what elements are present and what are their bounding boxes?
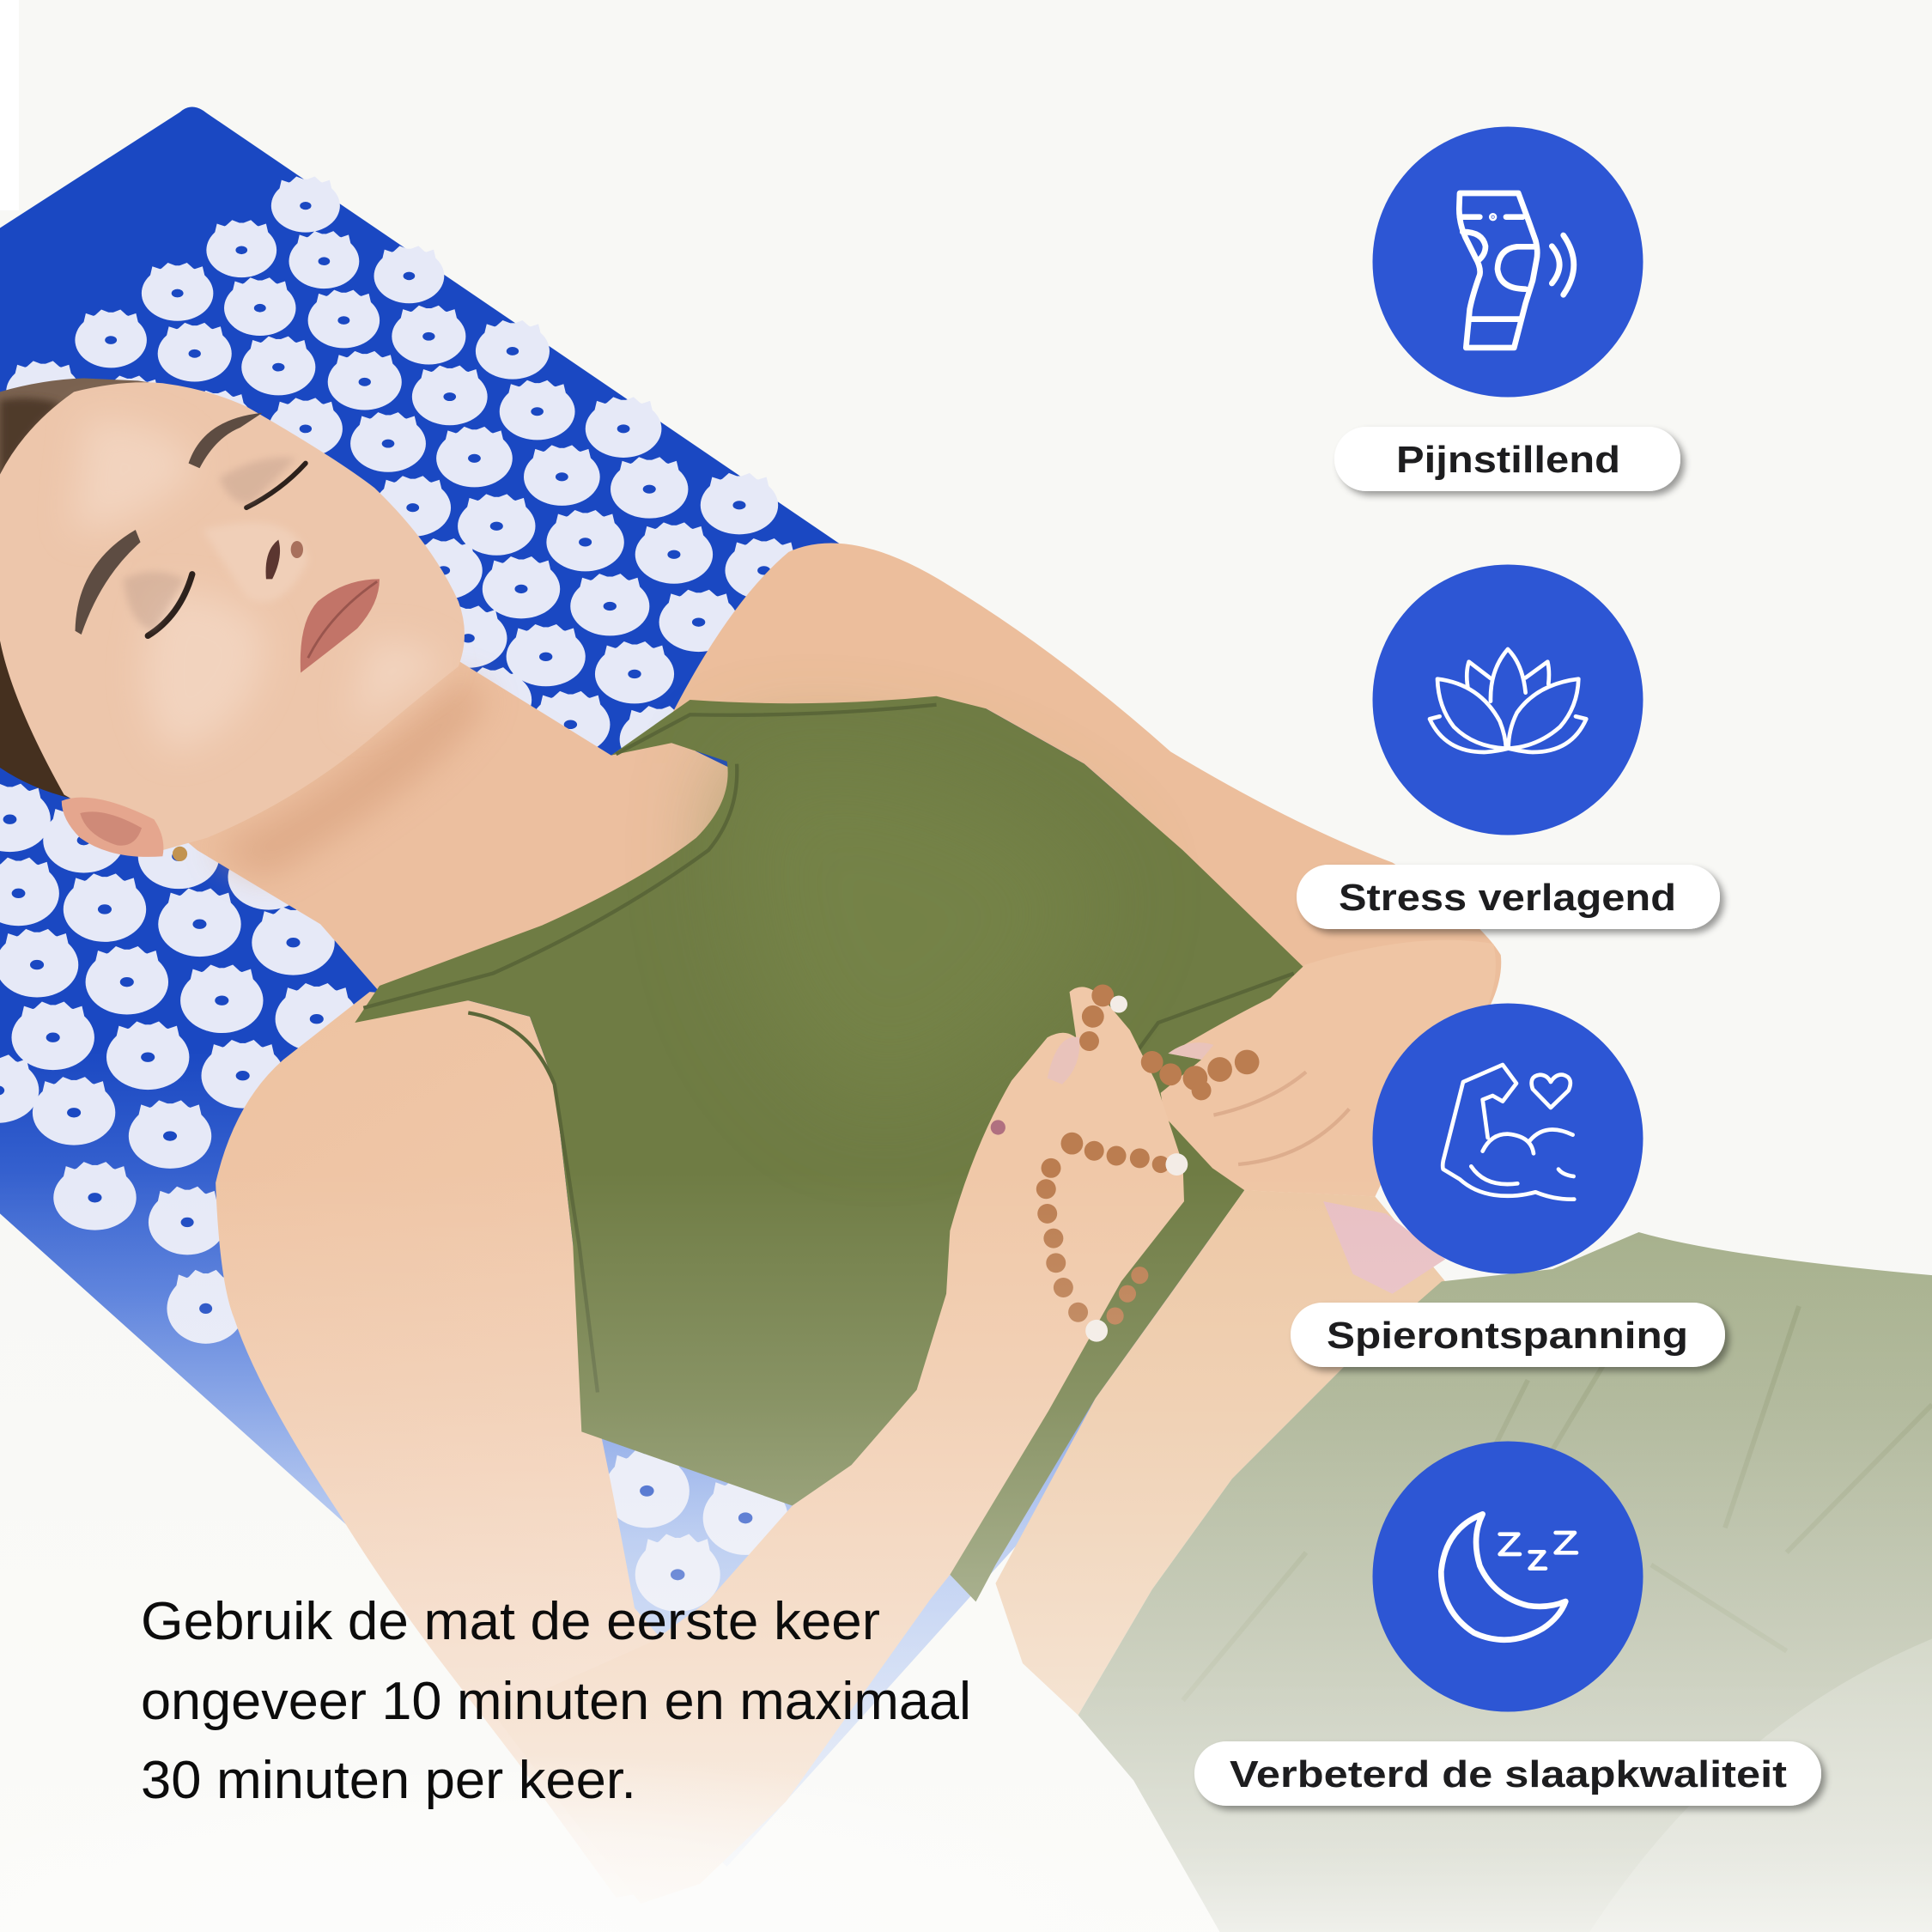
forearm and front hand: [493, 987, 1184, 1904]
lips: [301, 579, 380, 672]
tank seams: [363, 705, 1294, 1392]
icon circle: moon: [1372, 1441, 1643, 1712]
neck and chest: [123, 659, 734, 992]
mat spike discs upper: [6, 177, 803, 769]
tank top: [355, 696, 1303, 1601]
icon: lotus: [1430, 649, 1586, 752]
closed eyes: [148, 464, 306, 635]
upper shoulder and arm: [665, 543, 1501, 1196]
label pill: Verbeterd de slaapkwaliteit: Verbeterd de slaapkwaliteit: [1230, 1753, 1787, 1795]
eye shadow: [123, 458, 295, 631]
icon circle: lotus: [1372, 565, 1643, 835]
usage instruction text: ongeveer 10 minuten en maximaal: [141, 1672, 971, 1731]
label pill: Pijnstillend: Pijnstillend: [1396, 439, 1620, 481]
hand finger shadows: [1213, 1072, 1349, 1164]
mat spike discs lower: [0, 784, 788, 1612]
usage instruction text: Gebruik de mat de eerste keer: [141, 1592, 880, 1651]
neck shadow under jaw: [212, 677, 487, 878]
label pill: Verbeterd de slaapkwaliteit: [1194, 1741, 1821, 1806]
bottom fade overlay: [0, 1170, 1932, 1932]
benefit 3: muscle relaxation: [1291, 1003, 1725, 1367]
icon: knee brace: [1459, 193, 1574, 348]
hand behind: [1161, 940, 1496, 1196]
leggings folds: [1183, 1306, 1932, 1700]
midriff: [995, 1190, 1445, 1715]
label pill: Spierontspanning: [1291, 1303, 1725, 1367]
soft fade around elbow: [0, 1700, 1183, 1932]
leggings: [1078, 1232, 1932, 1932]
usage instruction text: 30 minuten per keer.: [141, 1751, 636, 1810]
lower upper arm: [216, 992, 788, 1898]
icon: flexed arm and heart: [1443, 1065, 1574, 1200]
acupressure mat: [0, 106, 1232, 1867]
nose: [204, 522, 308, 602]
icon circle: knee: [1372, 127, 1643, 397]
benefit 1: pain relief: [1334, 127, 1680, 491]
tank shading: [732, 761, 1109, 1109]
eyebrows: [76, 413, 263, 635]
mala beads: [991, 985, 1260, 1342]
benefit 4: sleep quality: [1194, 1441, 1821, 1806]
hair: [0, 379, 246, 799]
usage instruction text: [141, 1592, 971, 1810]
ear and earring: [62, 798, 187, 861]
second leg: [1589, 1638, 1932, 1932]
fingernails: [1048, 1037, 1213, 1084]
face: [0, 382, 465, 850]
label pill: Stress verlagend: [1297, 865, 1720, 929]
label pill: Pijnstillend: [1334, 427, 1680, 491]
icon circle: muscle: [1372, 1003, 1643, 1274]
label pill: Stress verlagend: Stress verlagend: [1339, 877, 1676, 919]
white strip at left edge: [0, 0, 19, 210]
tassel: [1323, 1201, 1445, 1294]
benefit 2: stress reduction: [1297, 565, 1720, 929]
face highlights: [74, 419, 444, 751]
icon: moon and zzz: [1441, 1514, 1577, 1640]
label pill: Spierontspanning: Spierontspanning: [1327, 1315, 1688, 1357]
